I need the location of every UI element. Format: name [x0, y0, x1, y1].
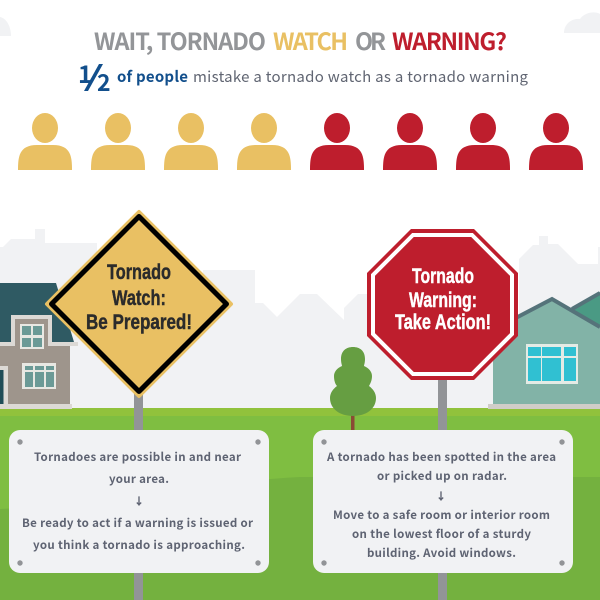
watch text: ↓	[134, 493, 144, 508]
title	[94, 23, 507, 57]
person 2	[91, 113, 145, 170]
person 6	[383, 113, 437, 170]
tornado watch sign	[47, 212, 231, 396]
people row: 8 icons, half gold half red	[18, 113, 583, 170]
watch text	[22, 449, 254, 553]
title: OR	[355, 23, 386, 57]
tornado warning sign	[367, 229, 518, 380]
one half figure: 2	[97, 64, 111, 98]
house: left	[0, 283, 78, 409]
warning text: Move to a safe room or interior room	[333, 507, 550, 523]
statement: of people	[117, 66, 188, 87]
watch text: Tornadoes are possible in and near	[34, 449, 242, 465]
one half figure	[78, 55, 111, 98]
watch text: you think a tornado is approaching.	[33, 537, 245, 553]
sign text: warning: Tornado	[412, 264, 474, 288]
tree	[330, 347, 376, 432]
warning text: or picked up on radar.	[377, 468, 507, 484]
person 5	[310, 113, 364, 170]
house: right	[488, 292, 600, 409]
one half figure: 1	[78, 55, 92, 90]
sign text: warning: Take Action!	[395, 310, 491, 334]
panel: warning description	[313, 430, 573, 573]
sign post: left	[134, 390, 143, 600]
sign text: watch	[86, 260, 192, 334]
sign text: warning	[395, 264, 491, 334]
sign text: watch: Watch:	[112, 286, 166, 310]
person 3	[164, 113, 218, 170]
person 8	[529, 113, 583, 170]
clouds	[0, 12, 600, 36]
title: WAIT, TORNADO	[94, 23, 266, 57]
panel: watch description	[9, 430, 269, 573]
background building silhouettes	[0, 229, 600, 408]
title: WARNING?	[392, 23, 507, 57]
warning text: A tornado has been spotted in the area	[326, 449, 556, 465]
statement: mistake a tornado watch as a tornado warning	[193, 66, 529, 87]
subtitle	[78, 55, 529, 98]
sign text: warning: Warning:	[409, 288, 477, 312]
title: WATCH	[273, 23, 348, 57]
person 7	[456, 113, 510, 170]
sign post: right	[438, 375, 447, 600]
sign text: watch: Tornado	[107, 260, 171, 284]
warning text: on the lowest floor of a sturdy	[352, 526, 531, 542]
person 1	[18, 113, 72, 170]
ground	[0, 408, 600, 600]
sign text: watch: Be Prepared!	[86, 310, 192, 334]
warning text: ↓	[436, 488, 446, 503]
watch text: your area.	[109, 471, 169, 487]
watch text: Be ready to act if a warning is issued or	[22, 515, 254, 531]
person 4	[237, 113, 291, 170]
warning text: building. Avoid windows.	[367, 545, 516, 561]
warning text	[326, 449, 556, 561]
